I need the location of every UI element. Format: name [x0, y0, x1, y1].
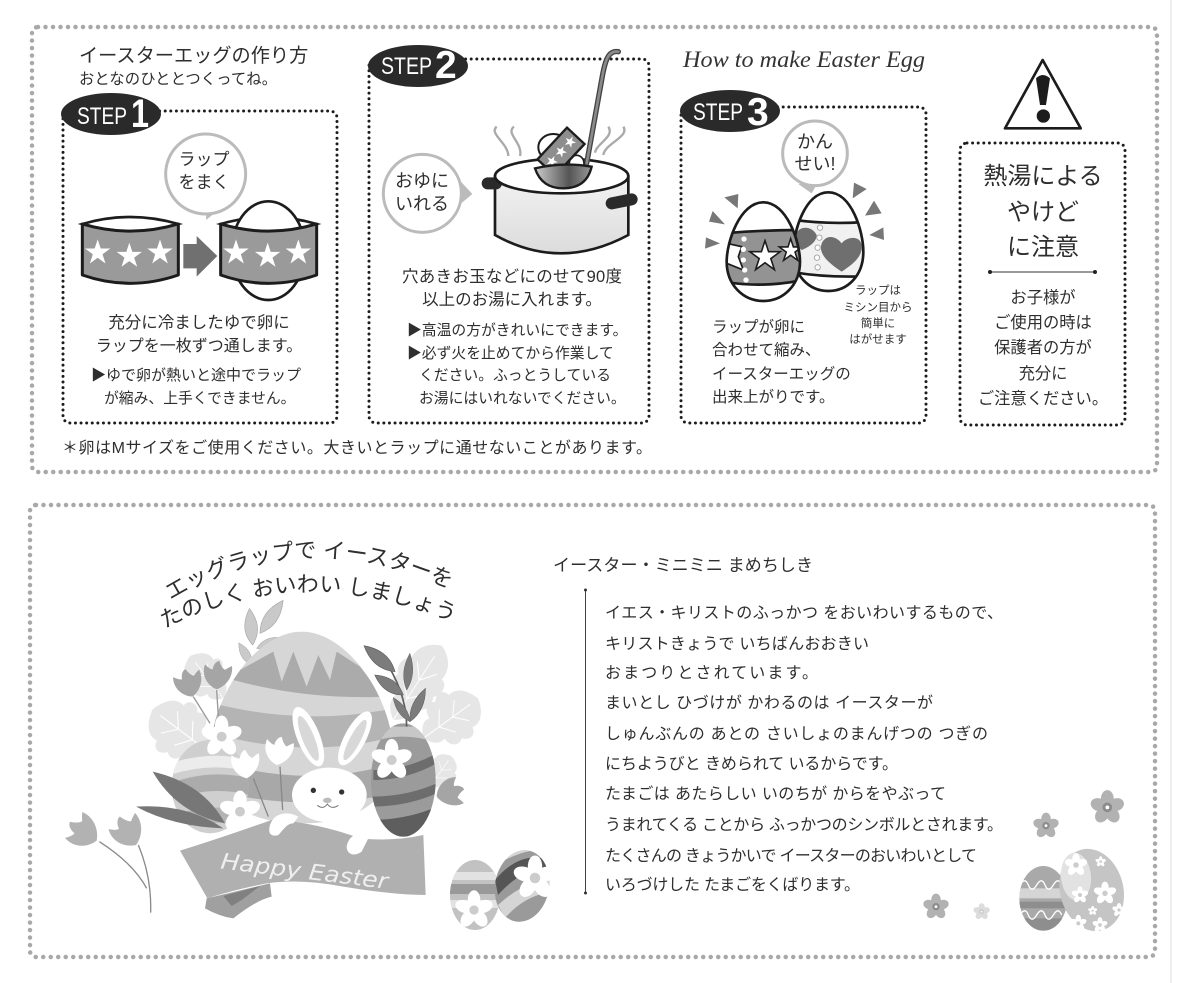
trivia body text: にちようびと きめられて いるからです。	[605, 755, 898, 773]
bubble text	[395, 171, 449, 214]
trivia body text: おまつりとされています。	[605, 664, 818, 682]
badge: step 3: 3	[747, 91, 769, 134]
step 2 description: ▶必ず火を止めてから作業して	[407, 345, 614, 362]
trivia body text: イエス・キリストのふっかつ をおいわいするもので、	[605, 604, 1003, 622]
step 2 description: ください。ふっとうしている	[419, 367, 611, 384]
bubble text: おゆに	[395, 171, 449, 191]
pale background leaves	[135, 632, 494, 796]
badge: step 1	[61, 92, 161, 136]
icon: pot with ladle	[383, 51, 632, 253]
panel: burn caution	[960, 143, 1125, 425]
step 2 description: お湯にはいれないでください。	[419, 390, 626, 407]
trivia body text	[605, 604, 1003, 894]
badge: step 2: STEP	[381, 53, 432, 80]
bunny	[286, 703, 378, 822]
caution text: 保護者の方が	[994, 339, 1092, 357]
step 1 description: ▶ゆで卵が熱いと途中でラップ	[91, 367, 301, 384]
bubble text: をまく	[178, 173, 230, 192]
icon: warning triangle	[1005, 60, 1081, 128]
trivia body text: キリストきょうで いちばんおおきい	[605, 635, 869, 653]
caution heading: に注意	[1007, 234, 1079, 261]
trivia body text: たくさんの きょうかいで イースターのおいわいとして	[605, 847, 977, 865]
step 3 description: イースターエッグの	[712, 365, 851, 383]
step 3 description: ラップが卵に	[712, 318, 805, 336]
left egg	[170, 740, 250, 837]
badge: step 2: 2	[435, 44, 457, 87]
illustration: corner eggs and flowers	[922, 790, 1132, 938]
illustration: small decorated eggs	[450, 850, 550, 930]
caution text: 充分に	[1019, 365, 1067, 383]
bracket line	[584, 588, 587, 894]
trivia heading: イースター・ミニミニ まめちしき	[553, 556, 813, 575]
bubble text: ラップ	[178, 150, 230, 169]
perforation note: ラップは	[855, 284, 901, 297]
panel: Easter trivia	[28, 502, 1158, 960]
trivia body text: しゅんぶんの あとの さいしょのまんげつの つぎの	[605, 725, 988, 743]
banner: Happy Easter	[219, 849, 392, 895]
step 3 description: 合わせて縮み、	[712, 341, 821, 359]
speech bubble: wrap	[166, 134, 246, 220]
perforation note: ミシン目から	[844, 301, 912, 314]
panel: step 2	[368, 44, 649, 423]
step 2 description: 以上のお湯に入れます。	[422, 290, 602, 309]
step 1 description: 充分に冷ましたゆで卵に	[108, 313, 290, 332]
trivia body text: うまれてくる ことから ふっかつのシンボルとされます。	[605, 816, 1003, 834]
bubble text	[178, 150, 230, 192]
perforation note: 簡単に	[861, 316, 895, 330]
bubble text: かん	[797, 132, 833, 152]
white tulips	[230, 736, 295, 817]
badge: step 1: STEP	[77, 103, 127, 130]
title: how to make Easter eggs: イースターエッグの作り方	[79, 45, 308, 67]
left stem flowers	[61, 808, 151, 913]
dark branch leaves	[360, 641, 430, 727]
big egg	[214, 632, 390, 824]
step 2 description	[402, 267, 627, 407]
step 1 description: が縮み、上手くできません。	[104, 390, 295, 407]
panel: step 3	[680, 90, 926, 423]
panel: step 1	[61, 92, 337, 423]
badge: step 1: 1	[131, 92, 149, 136]
caution text: お子様が	[1010, 289, 1076, 307]
trivia body text: まいとし ひづけが かわるのは イースターが	[605, 694, 933, 712]
step 3 description	[712, 318, 851, 406]
trivia body text: いろづけした たまごをくばります。	[605, 876, 860, 894]
grey tulip sprays	[171, 661, 469, 811]
caution heading	[983, 163, 1103, 261]
white daisies	[200, 716, 413, 833]
step 2 description: 穴あきお玉などにのせて90度	[402, 267, 622, 286]
step 3 description: 出来上がりです。	[712, 388, 834, 406]
footnote: ＊卵はMサイズをご使用ください。大きいとラップに通せないことがあります。	[62, 439, 652, 457]
illustration: Easter bunny with eggs	[61, 597, 494, 918]
dark long leaves	[136, 772, 225, 828]
panel: how to make Easter egg	[32, 27, 1157, 472]
title: how to make Easter eggs	[79, 45, 308, 88]
curved headline: たのしく おいわい しましょう	[160, 574, 454, 628]
banner	[180, 813, 426, 918]
caution heading: やけど	[1007, 199, 1079, 226]
perforation note: はがせます	[849, 332, 907, 346]
icon: wrap and egg illustration	[82, 134, 317, 300]
caution text: ご注意ください。	[978, 390, 1108, 408]
caution heading: 熱湯による	[983, 163, 1103, 190]
bubble text: せい!	[794, 154, 836, 174]
top left sprig	[235, 597, 288, 667]
badge: step 2	[368, 44, 468, 87]
title: how to make Easter eggs: おとなのひととつくってね。	[79, 71, 277, 88]
caution text	[978, 289, 1108, 408]
English title: How to make Easter Egg	[682, 47, 925, 72]
badge: step 3	[680, 90, 780, 134]
speech bubble: done	[783, 121, 847, 193]
step 1 description	[91, 313, 302, 407]
dark egg	[368, 723, 438, 838]
step 1 description: ラップを一枚ずつ通します。	[96, 337, 302, 355]
trivia body text: たまごは あたらしい いのちが からをやぶって	[605, 785, 946, 803]
perforation note	[844, 284, 912, 346]
bubble text: いれる	[395, 194, 449, 214]
badge: step 3: STEP	[693, 99, 743, 126]
bubble text	[794, 132, 836, 174]
caution text: ご使用の時は	[994, 314, 1092, 332]
speech bubble: pour in hot water	[383, 154, 472, 232]
icon: finished eggs	[705, 121, 884, 301]
step 2 description: ▶高温の方がきれいにできます。	[407, 322, 627, 339]
curved headline: エッグラップで イースターを	[166, 540, 450, 599]
